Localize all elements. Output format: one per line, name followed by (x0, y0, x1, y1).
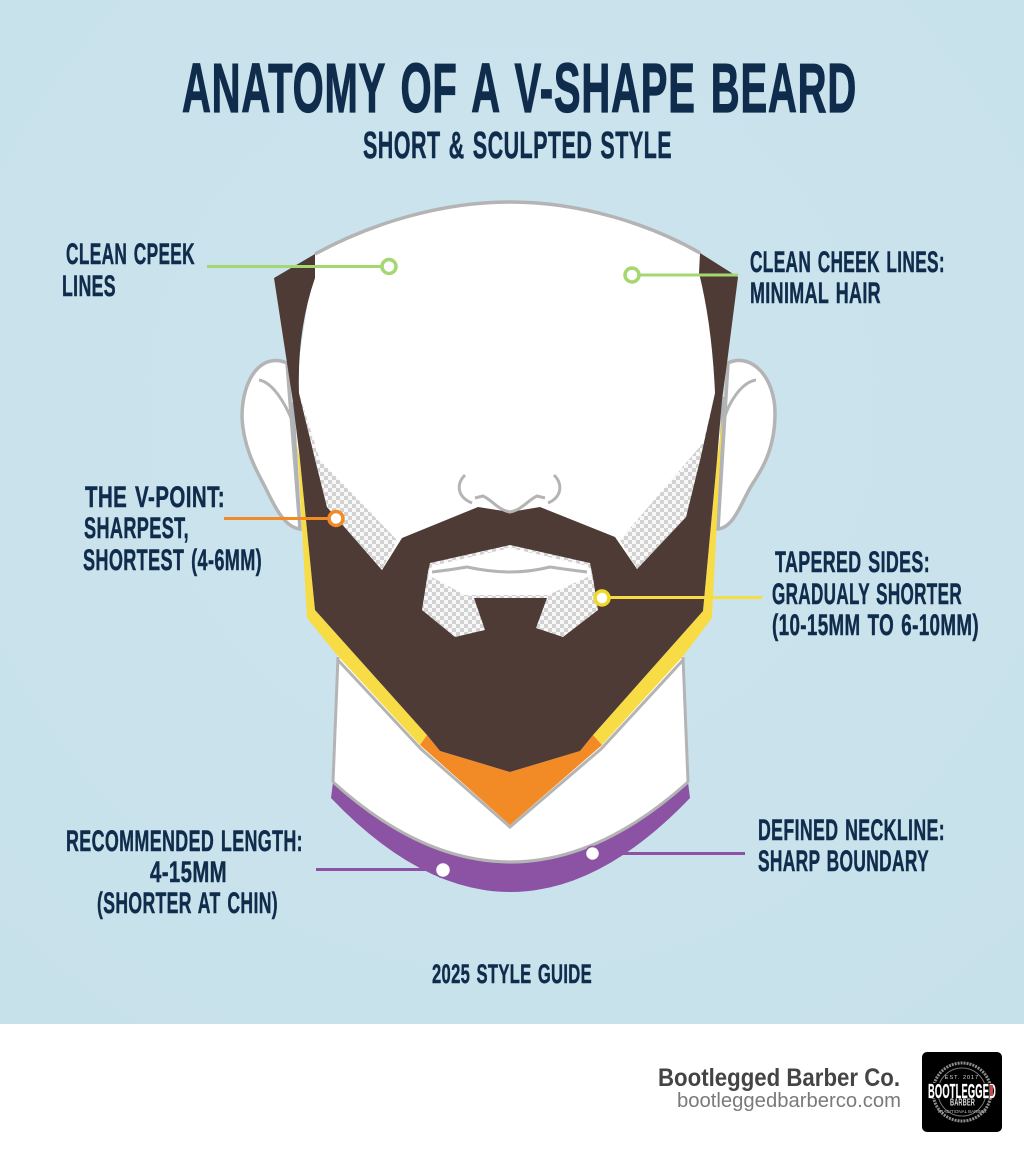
tapered sides: yellow bands (296, 415, 723, 745)
logo badge: EST. 2017 (945, 1075, 979, 1081)
callout: recommended length: 4-15MM (150, 856, 227, 889)
callout: clean cheek lines left: LINES (62, 270, 116, 303)
callout: defined neckline (586, 814, 945, 878)
nose (459, 475, 560, 512)
chin point: orange (420, 735, 602, 825)
subtitle: SHORT & SCULPTED STYLE (363, 125, 672, 167)
faded cheek right (620, 393, 715, 569)
left ear (242, 360, 300, 529)
footer panel (0, 1024, 1024, 1154)
callout: recommended length: (SHORTER AT CHIN) (97, 887, 278, 920)
footer brand name: Bootlegged Barber Co. (658, 1064, 900, 1092)
callout: clean cheek lines left (62, 238, 396, 303)
right ear (718, 360, 775, 529)
callout: recommended length: RECOMMENDED LENGTH: (66, 825, 303, 858)
footer url: bootleggedbarberco.com (677, 1090, 901, 1112)
callout: the V-point: THE V-POINT: (85, 481, 225, 514)
mouth and soul patch area (422, 545, 598, 637)
callout: recommended length (66, 825, 450, 920)
neck (333, 650, 688, 862)
callout: the V-point (83, 481, 343, 577)
head outline (315, 202, 700, 254)
logo badge (922, 1052, 1002, 1132)
jaw outline (337, 659, 684, 827)
callout: clean cheek lines left: CLEAN CPEEK (66, 238, 195, 271)
callout: tapered sides (595, 546, 979, 642)
callout: clean cheek lines right (625, 246, 945, 310)
callout: clean cheek lines right: MINIMAL HAIR (750, 277, 881, 310)
callout: the V-point: SHORTEST (4-6MM) (83, 544, 262, 577)
beard (274, 253, 738, 772)
faded cheek left (299, 393, 397, 570)
illustration: bearded face (242, 202, 775, 892)
logo badge: TRADITIONAL BARBER (937, 1109, 987, 1114)
style guide note: 2025 STYLE GUIDE (432, 959, 592, 989)
neckline band (331, 782, 690, 892)
neckline edge (333, 782, 688, 862)
callout: the V-point: SHARPEST, (84, 512, 189, 545)
ear seam lines (293, 397, 723, 529)
head (293, 202, 722, 822)
logo badge: BARBER (950, 1098, 975, 1108)
